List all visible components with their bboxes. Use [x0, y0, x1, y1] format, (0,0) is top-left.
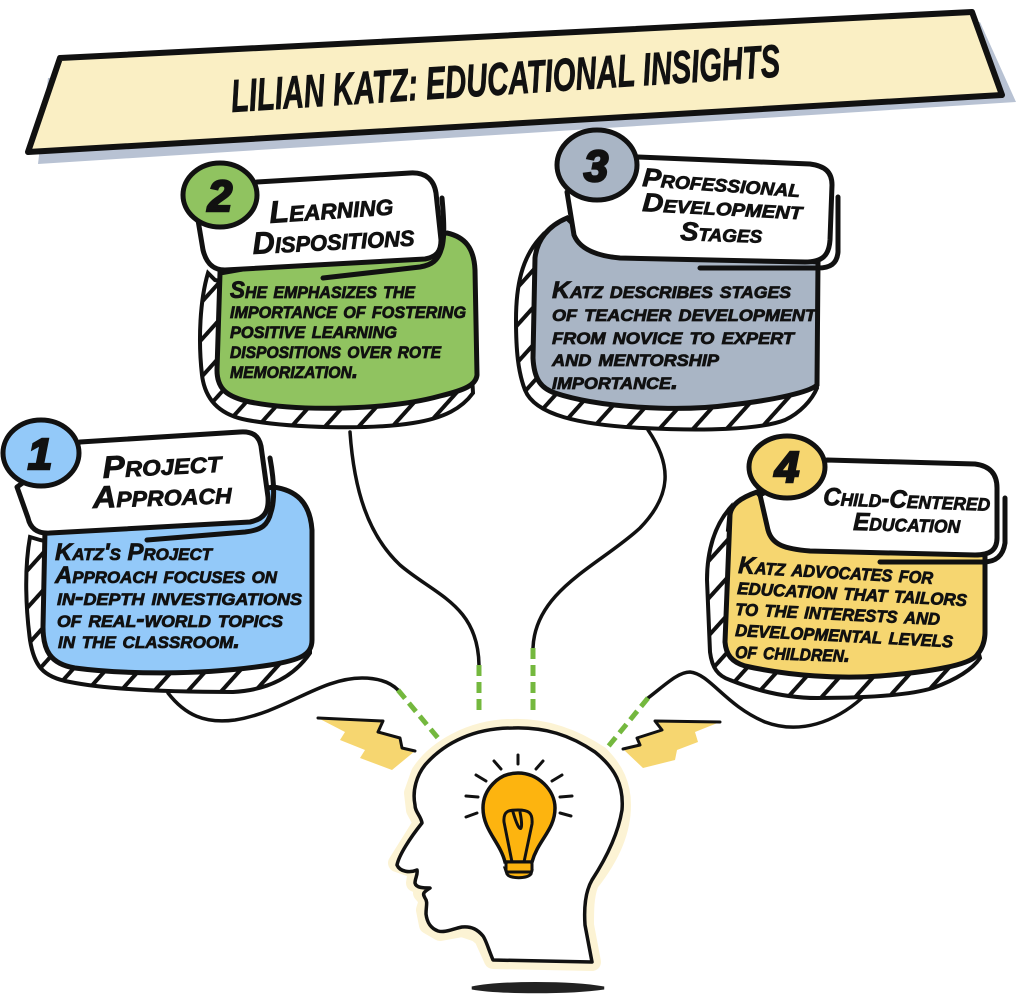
bulb rays [466, 755, 572, 817]
panel: project approach [3, 420, 312, 692]
heading: Development [642, 187, 805, 225]
header box [17, 432, 268, 533]
number badge: 2 [207, 172, 233, 221]
body text: Katz's Project [55, 539, 214, 566]
head outline [397, 728, 622, 962]
heading [642, 162, 805, 249]
number badge: 3 [584, 142, 608, 191]
body text [230, 277, 466, 384]
heading: Dispositions [252, 218, 415, 261]
body text: memorization. [230, 357, 358, 384]
heading: Stages [680, 216, 763, 249]
number badge [749, 436, 825, 498]
heading [252, 186, 415, 261]
icon: head with light bulb [397, 728, 622, 992]
body text: Approach focuses on [54, 562, 278, 589]
number badge: 1 [28, 430, 52, 479]
panel: learning dispositions [183, 163, 477, 427]
body text: Katz advocates for [738, 552, 935, 590]
body text: developmental levels [735, 615, 954, 653]
icon: lightning bolt right [623, 721, 720, 768]
body text: to the interests and [735, 594, 941, 631]
number badge [557, 130, 637, 200]
panel: child-centered education [707, 436, 1005, 698]
number badge: 4 [774, 443, 799, 492]
heading [91, 444, 233, 515]
body text: dispositions over rote [230, 337, 442, 364]
head base shadow [472, 984, 604, 992]
heading: Child-Centered [823, 483, 991, 517]
body text: from novice to expert [552, 323, 796, 350]
body text: education that tailors [737, 573, 968, 612]
header box [567, 157, 832, 262]
header box [760, 460, 997, 555]
number badge [183, 163, 257, 227]
heading: Professional [642, 162, 801, 203]
body text: and mentorship [551, 345, 720, 372]
body text: She emphasizes the [230, 277, 416, 304]
number badge [3, 420, 79, 486]
body text [735, 552, 968, 668]
heading: Project [102, 444, 224, 485]
title banner [28, 12, 1016, 164]
body text: Katz describes stages [552, 277, 792, 304]
heading: Approach [91, 475, 233, 515]
body text [551, 277, 818, 395]
bulb [483, 773, 555, 878]
panel: professional development stages [516, 130, 838, 429]
body text: in the classroom. [58, 627, 240, 654]
body text [54, 539, 303, 654]
head halo [397, 728, 622, 962]
body text: importance. [552, 368, 678, 395]
heading [823, 483, 991, 539]
body text: of real-world topics [57, 606, 284, 633]
body text: positive learning [230, 317, 397, 344]
heading: Education [853, 508, 961, 539]
body text: of teacher development [552, 300, 818, 327]
connector lines [168, 430, 862, 748]
icon: lightning bolt left [318, 718, 415, 770]
body text: importance of fostering [230, 297, 466, 324]
header box [198, 173, 441, 270]
body text: in-depth investigations [57, 584, 303, 611]
heading: Learning [268, 186, 394, 230]
body text: of children. [735, 637, 851, 668]
